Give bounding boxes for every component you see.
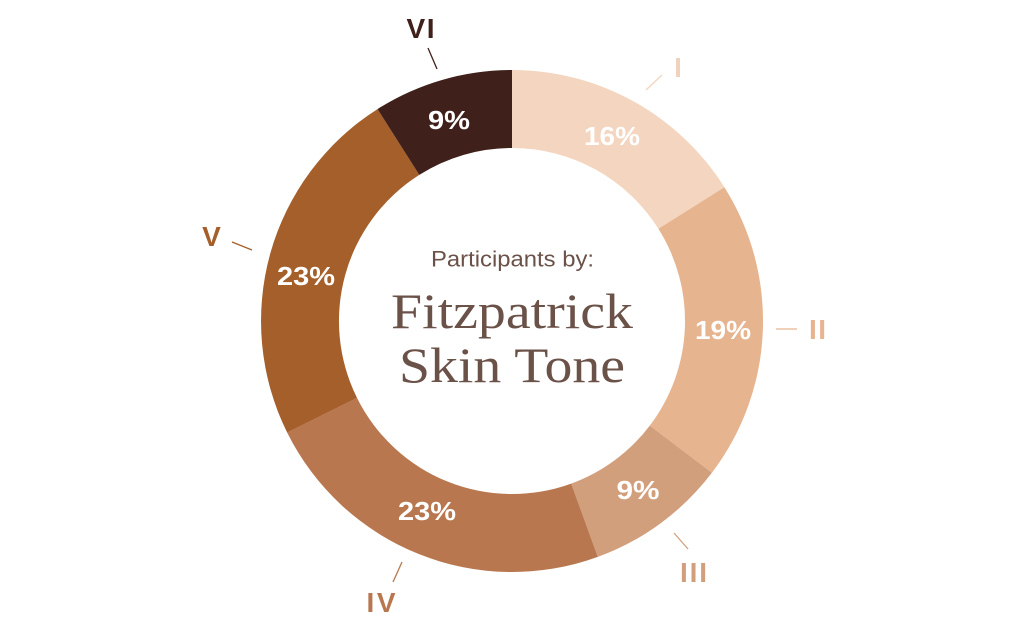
label II: II	[809, 314, 826, 345]
center caption	[391, 246, 633, 393]
label V: V	[202, 221, 221, 252]
segment I: 16%	[512, 70, 724, 229]
label II	[776, 314, 826, 345]
label III	[674, 533, 707, 588]
label IV	[366, 562, 402, 618]
segment II: 19%	[650, 187, 763, 473]
segment IV: 23%: 23%	[398, 496, 456, 526]
segment III: 9%	[571, 426, 712, 557]
caption title line 1: Fitzpatrick	[391, 283, 633, 339]
segment V: 23%	[261, 109, 419, 433]
segment IV: 23%	[287, 398, 598, 572]
segment VI: 9%: 9%	[428, 105, 470, 135]
label VI	[406, 13, 437, 69]
segment V: 23%: 23%	[277, 261, 335, 291]
label III: III	[680, 557, 707, 588]
segment VI: 9%	[378, 70, 512, 175]
label V	[202, 221, 252, 252]
label I	[646, 52, 682, 90]
label VI: VI	[406, 13, 434, 44]
caption title line 2: Skin Tone	[399, 337, 625, 393]
label I: I	[674, 52, 682, 83]
caption intro: Participants by:	[431, 246, 594, 272]
label IV: IV	[366, 587, 396, 618]
segment III: 9%: 9%	[616, 475, 660, 505]
segment II: 19%: 19%	[695, 315, 751, 345]
segment I: 16%: 16%	[584, 121, 640, 151]
